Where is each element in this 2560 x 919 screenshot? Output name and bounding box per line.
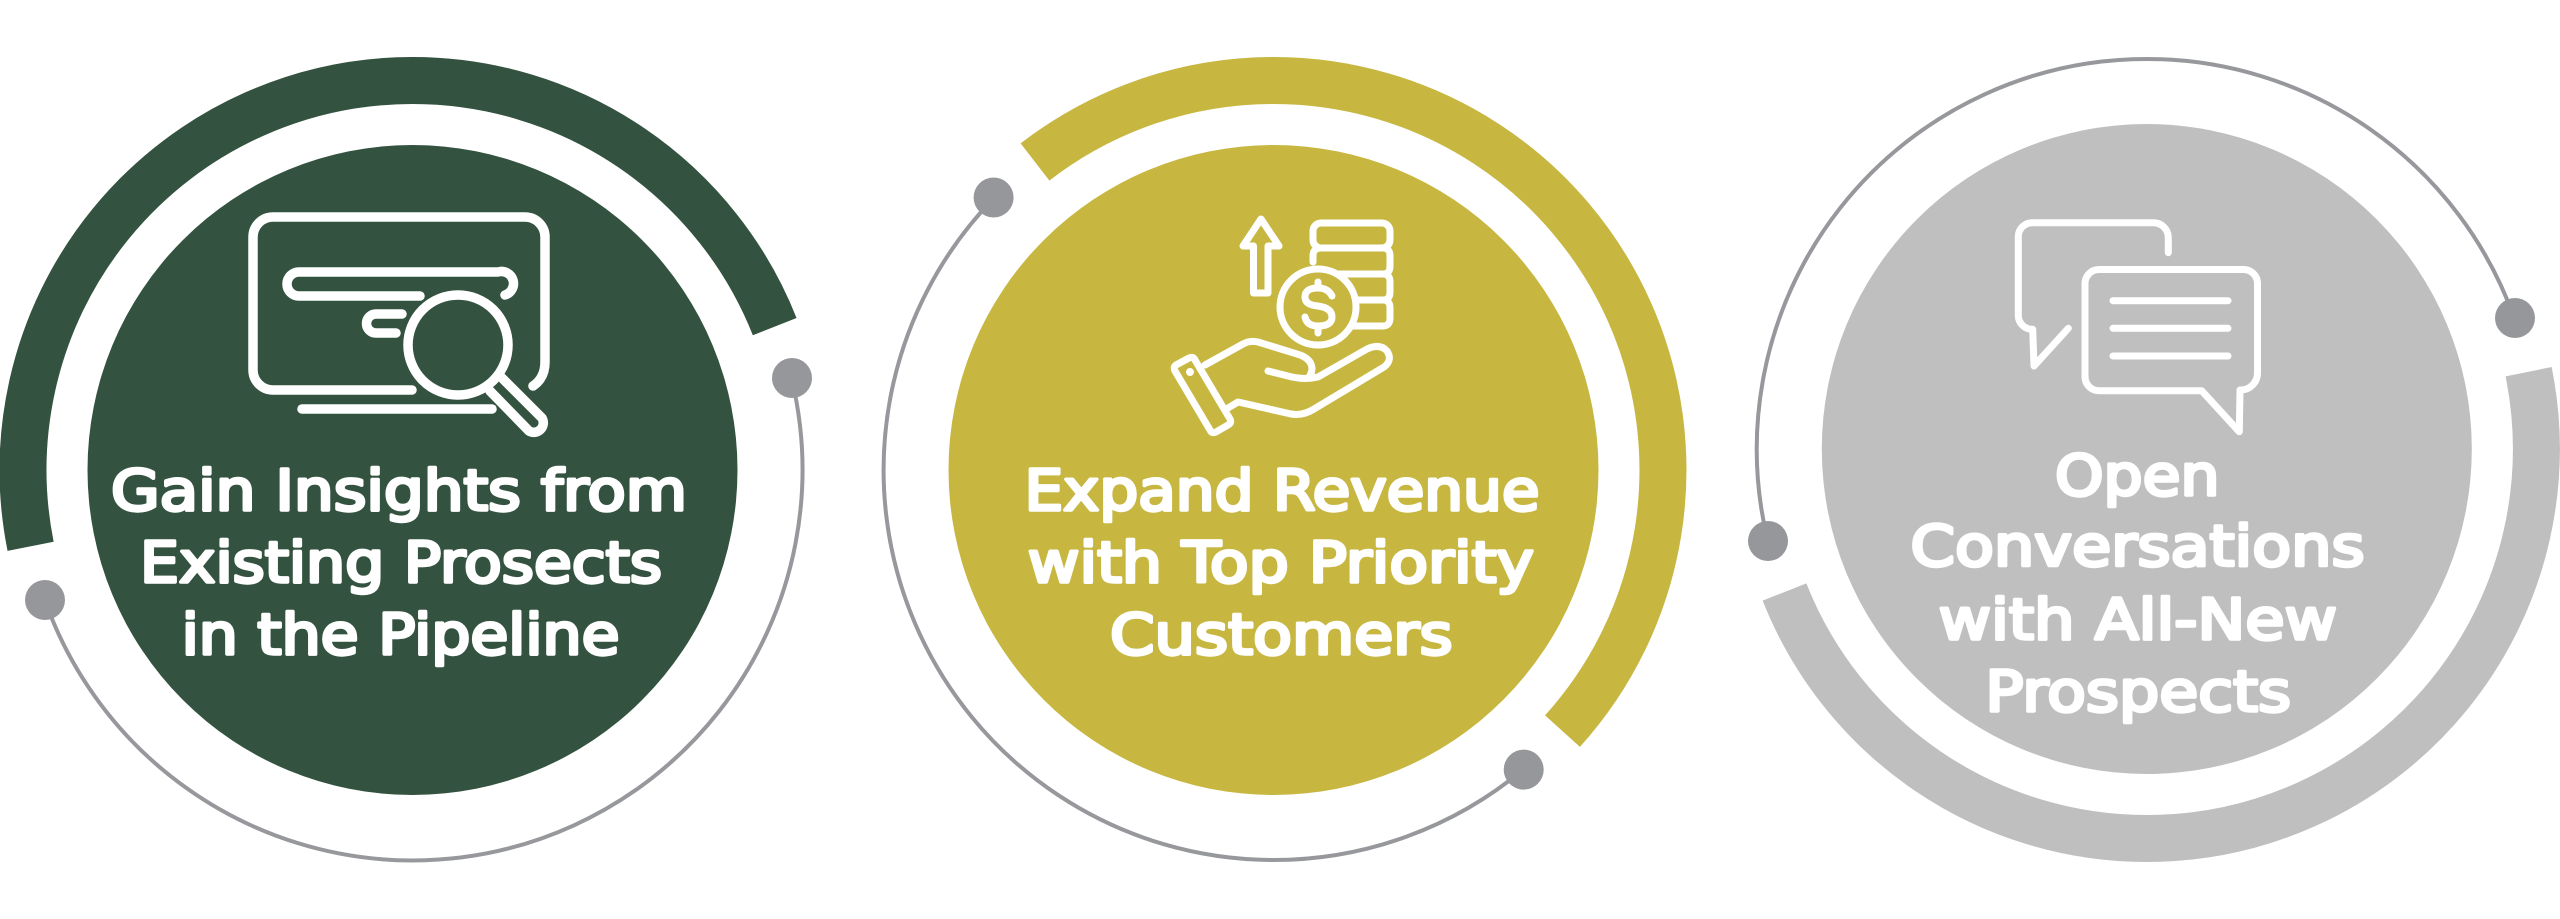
heading: expand revenue xyxy=(1024,459,1540,668)
thick gold arc xyxy=(1035,80,1663,731)
heading: open conversations: Open xyxy=(2055,444,2220,509)
heading: expand revenue: with Top Priority xyxy=(1028,531,1534,596)
thin grey arc xyxy=(45,378,802,860)
heading: gain insights: in the Pipeline xyxy=(182,603,620,668)
gold disc xyxy=(948,145,1598,795)
heading: gain insights: Existing Prosects xyxy=(140,531,662,596)
connector dot right xyxy=(2495,298,2535,338)
thick grey arc xyxy=(1784,372,2536,838)
icon: screen with magnifying glass xyxy=(253,217,545,432)
heading: open conversations: Conversations xyxy=(1910,515,2365,580)
heading: open conversations xyxy=(1910,444,2365,725)
connector dot left xyxy=(1748,521,1788,561)
connector dot bottom xyxy=(1504,750,1544,790)
thin grey arc xyxy=(1757,59,2514,541)
connector dot right xyxy=(772,358,812,398)
heading: open conversations: Prospects xyxy=(1985,660,2291,725)
icon: speech bubbles xyxy=(2018,223,2258,432)
heading: expand revenue: Customers xyxy=(1110,603,1453,668)
heading: gain insights xyxy=(111,459,687,668)
panel: open conversations circle xyxy=(1748,59,2536,838)
icon: hand with coins and up arrow xyxy=(1174,219,1390,433)
grey disc xyxy=(1822,124,2472,774)
connector dot left xyxy=(25,580,65,620)
thin grey arc xyxy=(884,198,1524,860)
panel: gain insights circle xyxy=(23,80,812,860)
thick green arc xyxy=(23,80,775,546)
heading: expand revenue: Expand Revenue xyxy=(1024,459,1540,524)
panel: expand revenue circle xyxy=(884,80,1663,860)
heading: open conversations: with All-New xyxy=(1939,588,2337,653)
green disc xyxy=(88,145,738,795)
heading: gain insights: Gain Insights from xyxy=(111,459,687,524)
connector dot top xyxy=(974,178,1014,218)
